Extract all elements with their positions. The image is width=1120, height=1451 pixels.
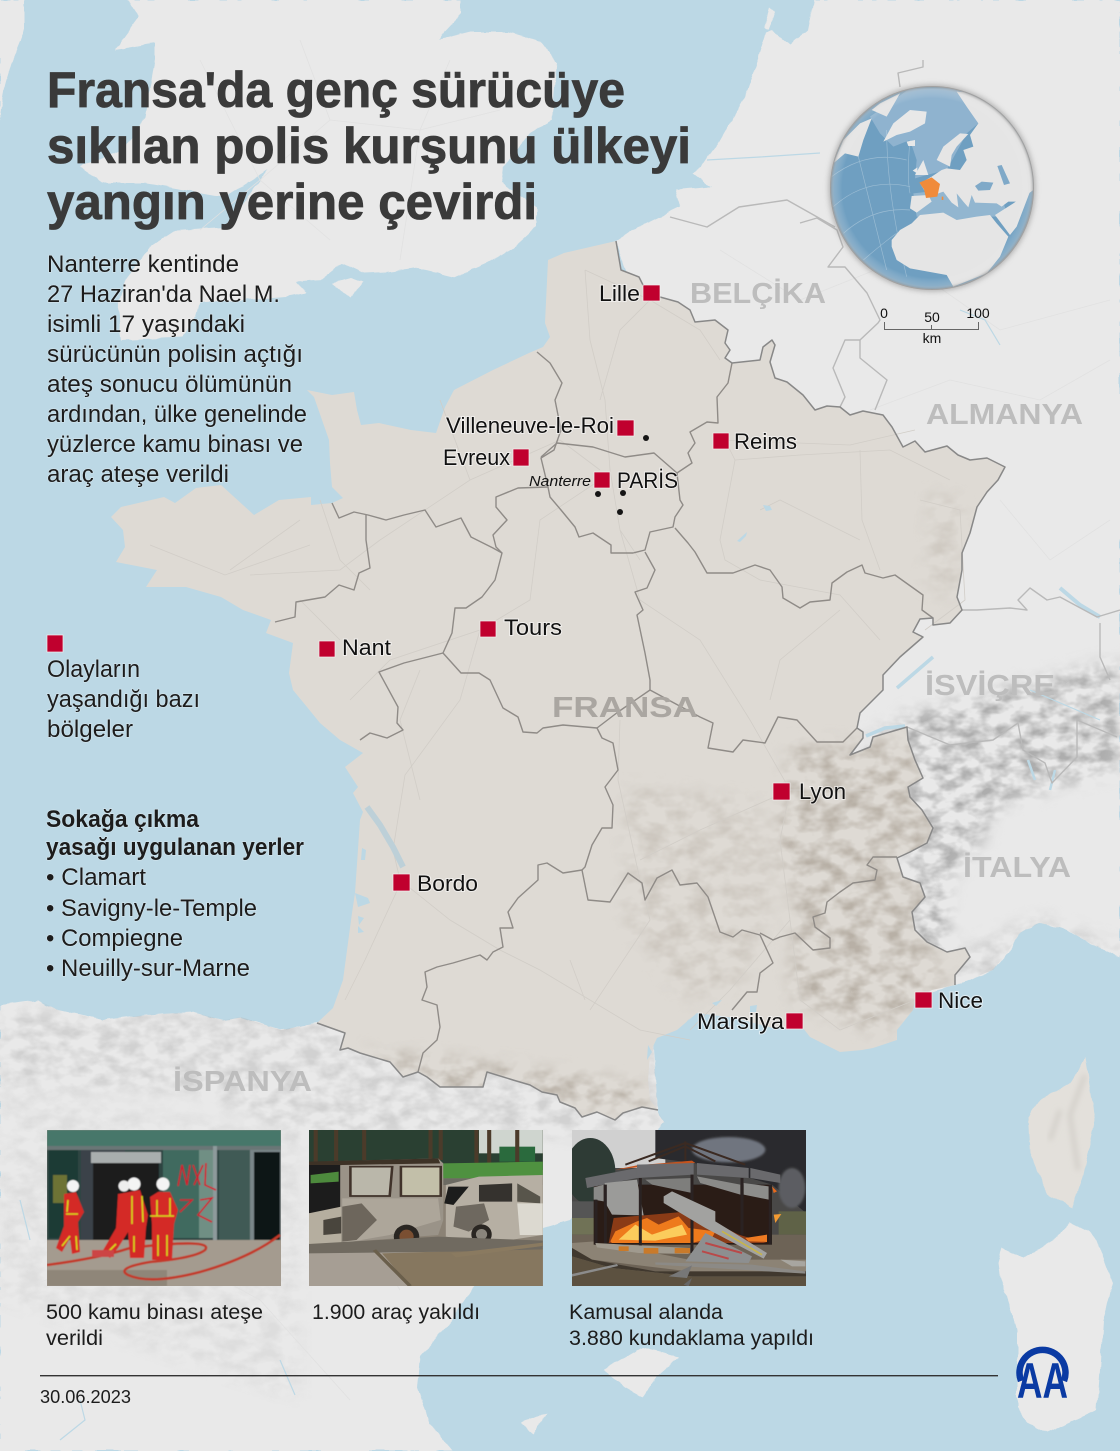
curfew heading: yasağı uygulanan yerler [46,834,304,861]
roof band [585,1163,780,1188]
curfew list [46,806,304,982]
graticule [832,130,910,277]
glow [609,1211,767,1243]
firefighter 2 [102,1190,148,1258]
scale bar: 0 [880,305,888,321]
title: yangın yerine çevirdi [47,174,537,230]
marker: Nice [915,988,983,1013]
legend text [47,656,200,743]
city markers [319,281,983,1034]
marker: Tours [480,615,562,640]
roads [150,270,965,1040]
base [595,1243,689,1254]
lakes and lagoons [355,505,772,1060]
marker: Nant: Nant [342,635,391,660]
photo: burned vehicles [309,1130,543,1286]
photo: burning kiosk [565,1128,808,1288]
title [47,62,691,230]
land: British Isles [913,160,928,175]
legend text: Olayların [47,656,140,683]
marker: Bordo: Bordo [417,871,478,896]
caption 2: 1.900 araç yakıldı [312,1301,480,1324]
graffiti [178,1163,216,1222]
land: Eurasia [920,92,1040,207]
label: İspanya: İSPANYA [173,1066,312,1098]
marker: Nant [319,635,391,660]
fallen sheets [685,1233,752,1263]
intro text: sürücünün polisin açtığı [47,341,303,368]
intro text [47,251,307,488]
hillshade: French Alps, Massif Central, Pyrenees [382,499,958,1114]
water: Black Sea [975,182,993,191]
country labels [173,278,1083,1098]
title: Fransa'da genç sürücüye [47,62,625,118]
curfew places: • Neuilly-sur-Marne [46,955,250,982]
regional borders [275,352,933,1072]
marker: Nanterre, Paris [529,468,678,493]
hoses [47,1235,280,1279]
curfew heading [46,806,304,861]
ground and debris [309,1252,422,1286]
marker: Lyon: Lyon [799,779,846,804]
date: 30.06.2023 [40,1387,131,1407]
France highlighted [919,177,940,198]
caption 1: verildi [46,1327,103,1350]
curfew dots [595,435,649,515]
kiosk interior [594,1185,772,1245]
legend [47,635,200,743]
land: Iceland [907,140,915,146]
roof frame [625,1141,745,1165]
map: France [0,200,1120,1208]
logo: Anadolu Agency: AA [1017,1353,1068,1409]
ground [572,1234,806,1276]
logo: Anadolu Agency [1017,1350,1068,1409]
France national border [616,241,1005,985]
photo: firefighters at building [47,1130,281,1286]
intro text: Nanterre kentinde [47,251,239,278]
posts [596,1175,770,1253]
hillshade: Alps and Apennines [864,658,1120,975]
land: Africa [892,213,1008,287]
shallow seas [870,88,978,178]
scale bar: km [923,330,941,346]
marker: Lille: Lille [599,281,640,306]
curfew places: • Savigny-le-Temple [46,895,257,922]
sliding sheet [664,1191,767,1259]
marker: Nanterre, Paris: PARİS [617,468,678,493]
marker: Lyon [773,779,846,804]
land: Arabia [995,192,1030,235]
land: Corsica [1028,1057,1095,1208]
intro text: ateş sonucu ölümünün [47,371,292,398]
marker: Evreux: Evreux [443,445,510,470]
flames [610,1216,715,1243]
wheels [394,1224,420,1240]
title: sıkılan polis kurşunu ülkeyi [47,118,691,174]
national borders [670,60,1120,783]
marker: Tours: Tours [504,615,562,640]
Corsica relief [1050,1075,1085,1170]
locator globe [829,85,1040,291]
intro text: araç ateşe verildi [47,461,229,488]
firefighter 3 [150,1192,178,1260]
caption 3: 3.880 kundaklama yapıldı [569,1327,814,1350]
land: Greenland [883,110,927,142]
label: Almanya: ALMANYA [926,399,1083,431]
scale bar: 50 [924,309,940,325]
curfew places: • Clamart [46,864,146,891]
land: Scandinavia [937,133,968,167]
France landmass [111,241,1004,1119]
marker: Nice: Nice [938,988,983,1013]
intro text: 27 Haziran'da Nael M. [47,281,280,308]
caption 3: Kamusal alanda [569,1301,723,1324]
shutters [605,1180,644,1215]
Pyrenees border [317,1023,658,1120]
curfew places [46,864,257,982]
marker: Nanterre, Paris: Nanterre [529,473,591,490]
van door panels [342,1198,441,1243]
curfew places: • Compiegne [46,925,183,952]
Corsica highlighted [942,197,943,200]
photo captions [46,1301,814,1350]
label: Fransa: FRANSA [552,692,698,724]
marker: Bordo [393,871,478,896]
land: Iberia [910,195,932,213]
intro text: yüzlerce kamu binası ve [47,431,303,458]
marker: Marsilya: Marsilya [697,1009,785,1034]
firefighter 1 [56,1192,84,1254]
intro text: isimli 17 yaşındaki [47,311,245,338]
legend text: yaşandığı bazı [47,686,200,713]
marker: Lille [599,281,660,306]
caption 3 [569,1301,814,1350]
legend text: bölgeler [47,716,133,743]
van windows [350,1167,392,1196]
label: İsviçre: İSVİÇRE [925,670,1055,702]
scale bar: 100 [966,305,990,321]
water: Caspian [997,165,1010,185]
scale bar [880,305,990,346]
label: Belçika: BELÇİKA [690,278,826,310]
car body [446,1175,543,1243]
label: İtalya: İTALYA [963,852,1071,884]
caption 1: 500 kamu binası ateşe [46,1301,263,1324]
hillshade: northern Spain [0,1006,660,1377]
globe rim [830,86,1034,290]
van body [340,1158,444,1242]
intro text: ardından, ülke genelinde [47,401,307,428]
caption 1 [46,1301,263,1350]
marker: Reims: Reims [734,429,797,454]
marker: Villeneuve-le-Roi: Villeneuve-le-Roi [446,413,614,438]
curfew heading: Sokağa çıkma [46,806,200,833]
globe shadow [829,85,1035,291]
globe disc [830,86,1040,290]
legend marker [47,635,63,652]
land: Canada [833,93,900,163]
